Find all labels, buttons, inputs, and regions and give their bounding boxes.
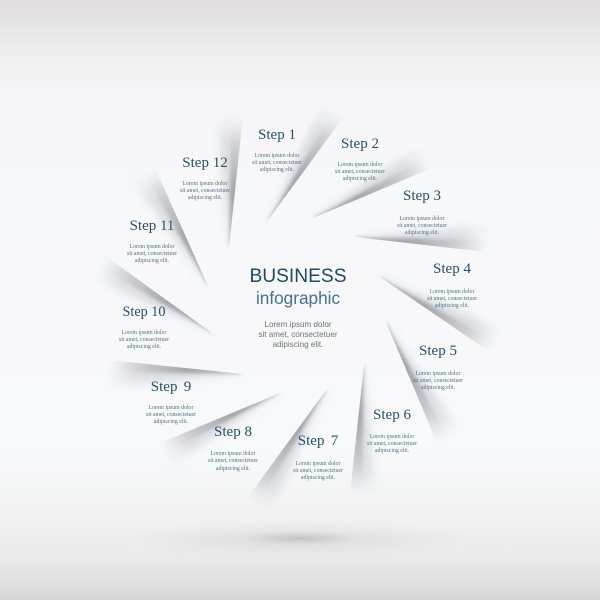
step 6: Lorem ipsum dolor bbox=[370, 434, 414, 440]
step 1: Lorem ipsum dolor bbox=[255, 153, 299, 159]
center title block: Lorem ipsum dolor bbox=[264, 320, 332, 329]
step 11: Step 11 bbox=[130, 218, 174, 234]
step 2: Step 2 bbox=[341, 136, 379, 152]
step 2: sit amet, consectetuer bbox=[335, 169, 385, 175]
step 8 bbox=[208, 424, 258, 472]
step 6: adipiscing elit. bbox=[375, 448, 410, 454]
step 5 bbox=[413, 343, 463, 391]
step 8: adipiscing elit. bbox=[216, 466, 251, 472]
step 7: sit amet, consectetuer bbox=[293, 468, 343, 474]
step 9: sit amet, consectetuer bbox=[146, 412, 196, 418]
step 5: Lorem ipsum dolor bbox=[416, 371, 460, 377]
step 6: sit amet, consectetuer bbox=[367, 441, 417, 447]
step 4: adipiscing elit. bbox=[435, 303, 470, 309]
step 8: sit amet, consectetuer bbox=[208, 458, 258, 464]
step 12: sit amet, consectetuer bbox=[180, 188, 230, 194]
step 3: sit amet, consectetuer bbox=[397, 223, 447, 229]
step 9: adipiscing elit. bbox=[154, 419, 189, 425]
step 11: sit amet, consectetuer bbox=[127, 251, 177, 257]
step 10: adipiscing elit. bbox=[127, 344, 162, 350]
step 7: Step 7 bbox=[298, 433, 339, 449]
step 7 bbox=[293, 433, 343, 481]
step 9: Lorem ipsum dolor bbox=[149, 405, 193, 411]
step 12 bbox=[180, 155, 230, 201]
step 5: adipiscing elit. bbox=[421, 385, 456, 391]
step 11: adipiscing elit. bbox=[135, 258, 170, 264]
step 4: Step 4 bbox=[433, 261, 471, 277]
step 2: adipiscing elit. bbox=[343, 176, 378, 182]
step 1 bbox=[252, 127, 302, 173]
step 11: Lorem ipsum dolor bbox=[130, 244, 174, 250]
center title block: sit amet, consectetuer bbox=[258, 330, 338, 339]
step 10 bbox=[119, 304, 169, 350]
step 4: sit amet, consectetuer bbox=[427, 296, 477, 302]
step 4 bbox=[427, 261, 477, 309]
step 5: sit amet, consectetuer bbox=[413, 378, 463, 384]
step 3: Lorem ipsum dolor bbox=[400, 216, 444, 222]
step 12: adipiscing elit. bbox=[188, 195, 223, 201]
center title block: BUSINESS bbox=[249, 266, 347, 287]
center title block bbox=[249, 266, 347, 349]
step 11 bbox=[127, 218, 177, 264]
step 9 bbox=[146, 379, 196, 425]
floor shadow bbox=[113, 520, 483, 560]
step 5: Step 5 bbox=[419, 343, 457, 359]
step 1: Step 1 bbox=[258, 127, 296, 143]
step 6: Step 6 bbox=[373, 407, 411, 423]
step 2 bbox=[335, 136, 385, 182]
step 1: sit amet, consectetuer bbox=[252, 160, 302, 166]
step 7: adipiscing elit. bbox=[301, 475, 336, 481]
step 10: Lorem ipsum dolor bbox=[122, 330, 166, 336]
step 10: sit amet, consectetuer bbox=[119, 337, 169, 343]
step 4: Lorem ipsum dolor bbox=[430, 289, 474, 295]
step 1: adipiscing elit. bbox=[260, 167, 295, 173]
step 2: Lorem ipsum dolor bbox=[338, 162, 382, 168]
center title block: infographic bbox=[256, 288, 340, 308]
step 3: Step 3 bbox=[403, 188, 441, 204]
step 10: Step 10 bbox=[123, 304, 165, 320]
step 8: Lorem ipsum dolor bbox=[211, 451, 255, 457]
step 9: Step 9 bbox=[151, 379, 191, 395]
spiral fold shadows bbox=[87, 99, 509, 517]
step 3 bbox=[397, 188, 447, 236]
step 12: Lorem ipsum dolor bbox=[183, 181, 227, 187]
step 3: adipiscing elit. bbox=[405, 230, 440, 236]
step 12: Step 12 bbox=[182, 155, 228, 171]
step 7: Lorem ipsum dolor bbox=[296, 461, 340, 467]
center title block: adipiscing elit. bbox=[273, 340, 323, 349]
step 8: Step 8 bbox=[214, 424, 252, 440]
step 6 bbox=[367, 407, 417, 454]
